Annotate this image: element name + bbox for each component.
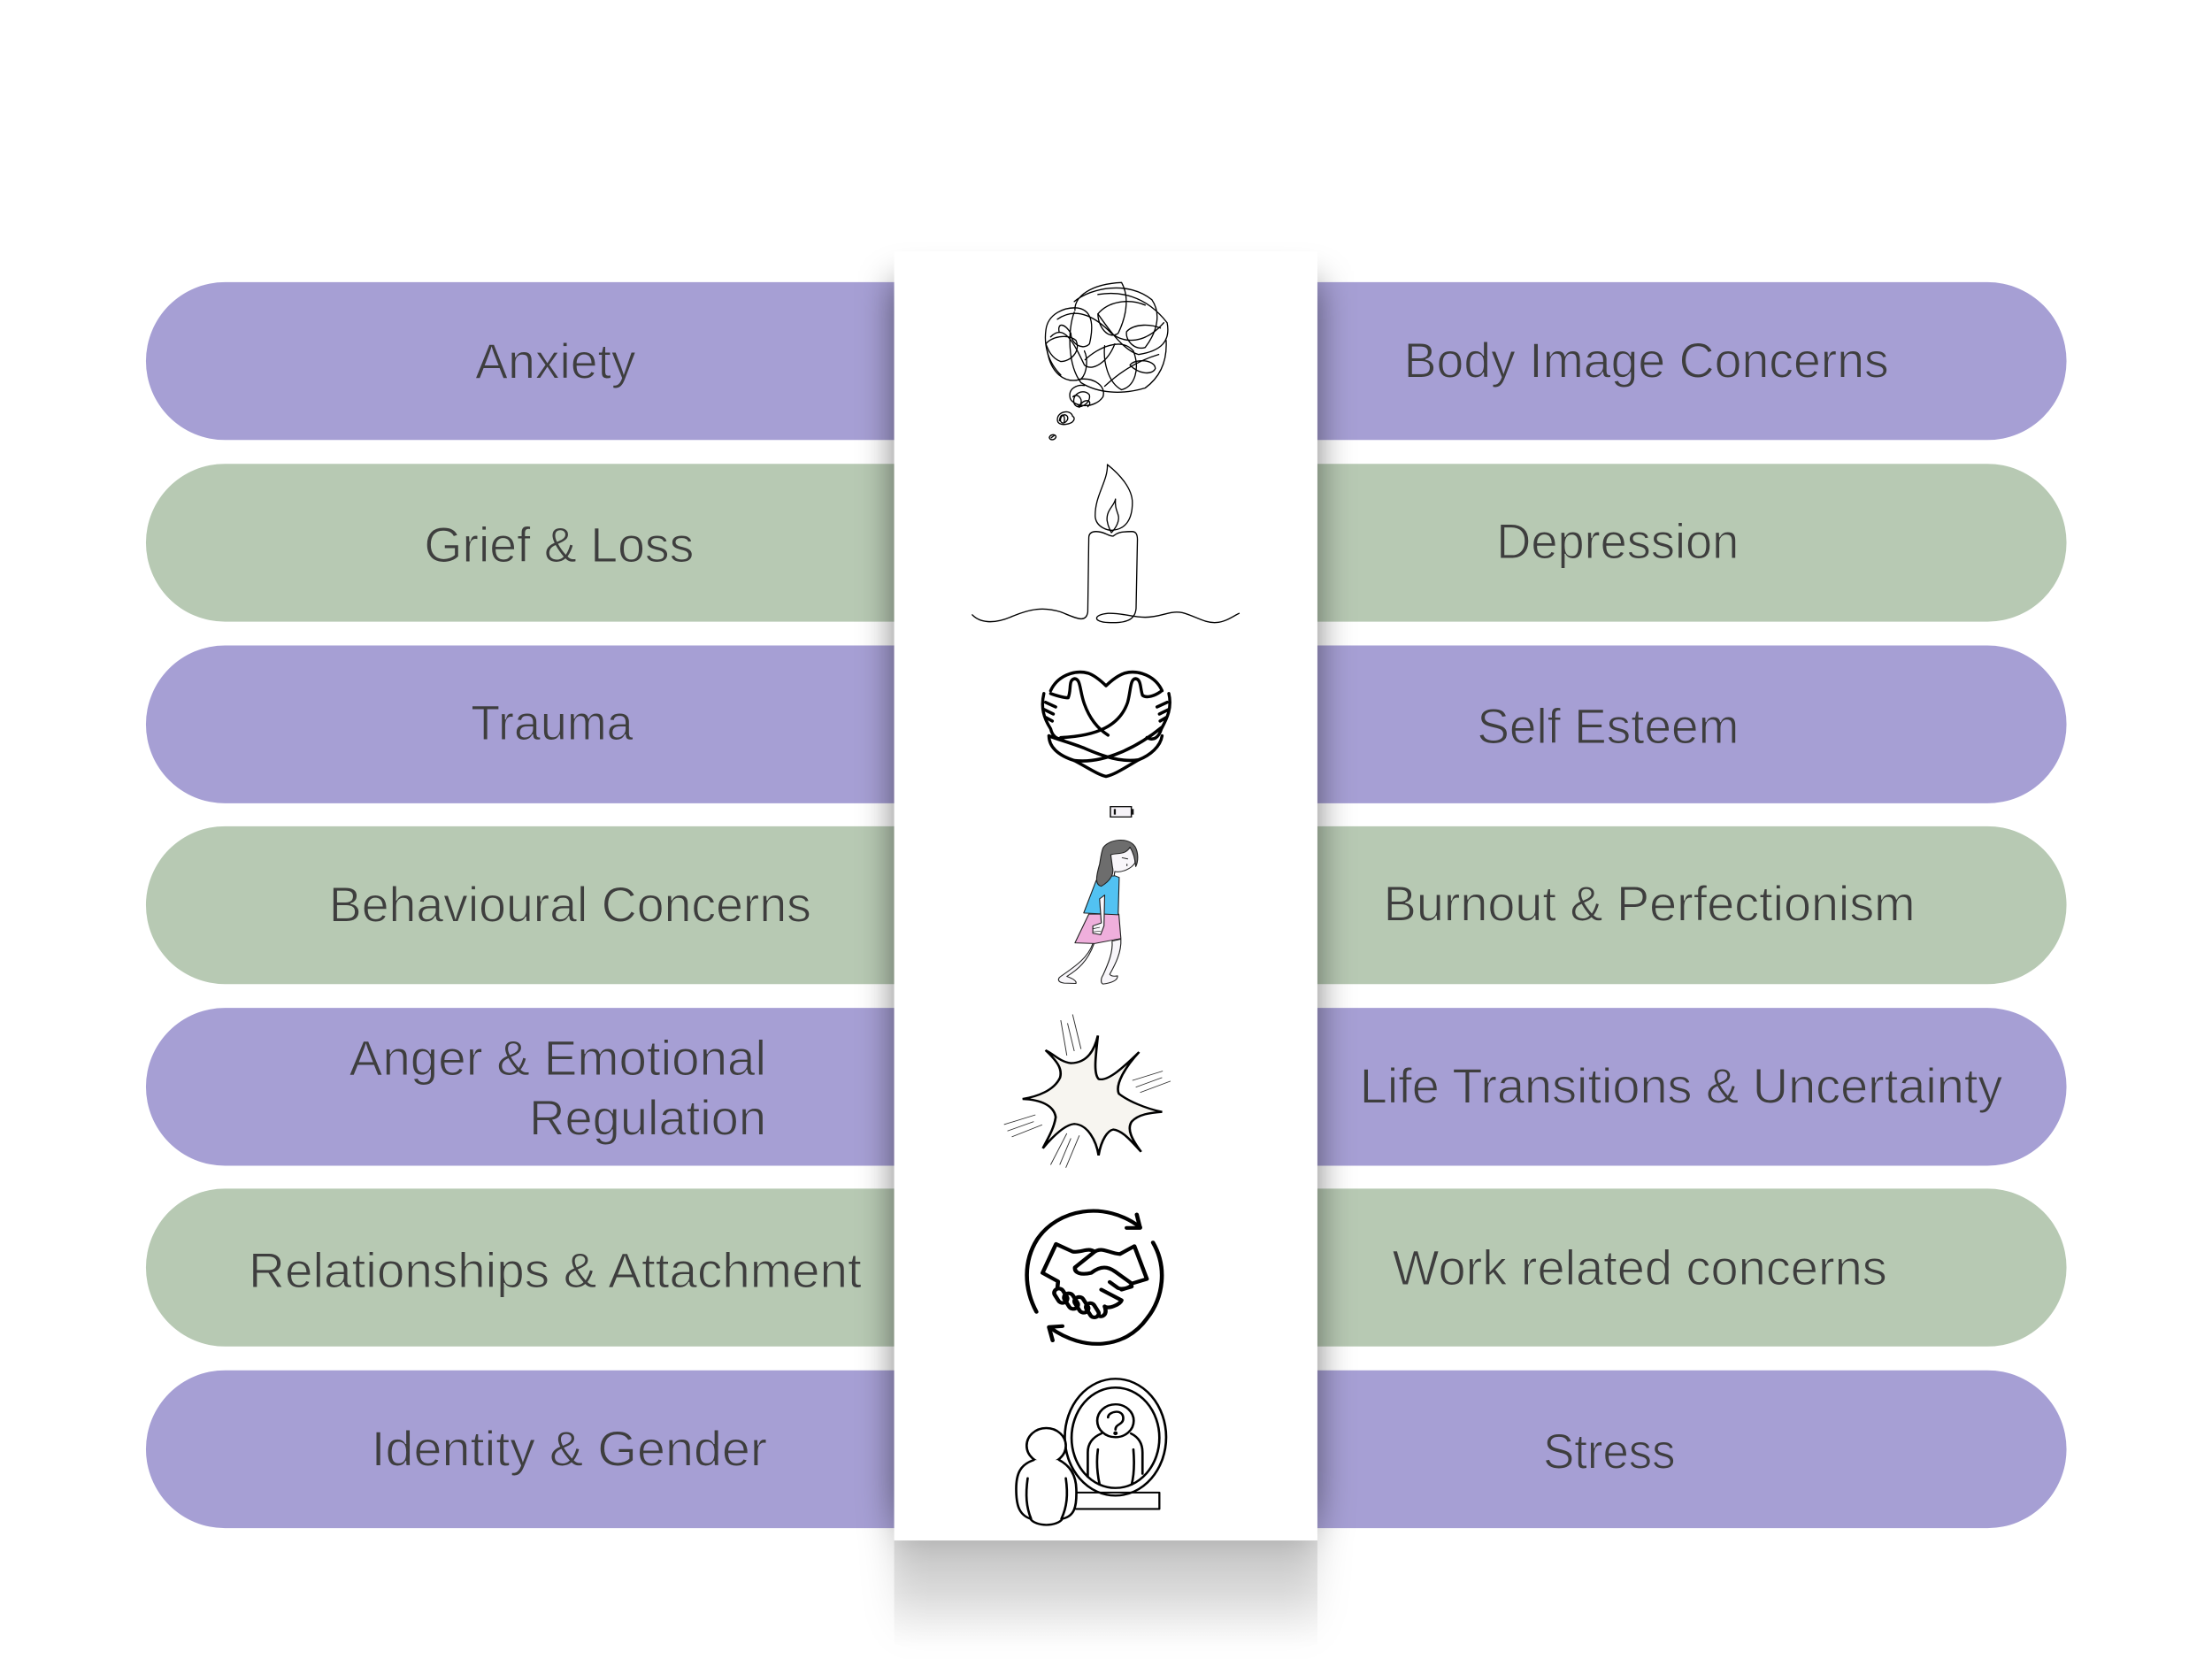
pill: Body Image Concerns [1305, 282, 2067, 440]
pill: Behavioural Concerns [146, 826, 900, 984]
pill: Work related concerns [1305, 1188, 2067, 1347]
center white panel [895, 251, 1317, 1540]
pill: Life Transitions & Uncertainty: Life Transitions & Uncertainty [1360, 1058, 2002, 1114]
icon: tired girl [1058, 840, 1138, 984]
pill: Anxiety: Anxiety [475, 334, 636, 389]
pill: Identity & Gender [146, 1371, 900, 1528]
pill: Anger & Emotional Regulation [146, 1008, 900, 1166]
pill: Depression [1305, 464, 2067, 622]
pill: Self Esteem [1305, 646, 2067, 803]
icon: handshake with circular arrows [1027, 1211, 1162, 1344]
pill: Body Image Concerns: Body Image Concerns [1404, 333, 1889, 388]
pill: Behavioural Concerns: Behavioural Concerns [329, 876, 811, 932]
pill: Anxiety [146, 282, 900, 440]
pill: Depression: Depression [1496, 513, 1739, 569]
pill: Burnout & Perfectionism [1305, 826, 2067, 984]
icon: candle [972, 465, 1239, 623]
panel shadow [895, 282, 1317, 1645]
pill: Trauma [146, 646, 900, 803]
icon: tangled thought bubble [1045, 282, 1168, 440]
pill: Anger & Emotional Regulation: Regulation [529, 1090, 766, 1146]
pill: Work related concerns: Work related concerns [1393, 1240, 1887, 1295]
pill: Self Esteem: Self Esteem [1477, 698, 1739, 754]
icon: person at mirror with question mark [1016, 1379, 1166, 1525]
pill: Grief & Loss: Grief & Loss [424, 517, 694, 572]
pill: Identity & Gender: Identity & Gender [372, 1420, 767, 1476]
panel reflection [895, 1539, 1317, 1647]
icon: burst [1004, 1014, 1171, 1168]
pill: Relationships & Attachment: Relationships & Attachment [249, 1242, 862, 1298]
pill: Anger & Emotional Regulation: Anger & Emotional [349, 1030, 766, 1086]
pill: Burnout & Perfectionism: Burnout & Perfectionism [1384, 875, 1916, 931]
pill: Grief & Loss [146, 464, 900, 622]
pill: Stress [1305, 1371, 2067, 1528]
pill: Life Transitions & Uncertainty [1305, 1008, 2067, 1166]
pill: Relationships & Attachment [146, 1188, 900, 1347]
pill: Stress: Stress [1543, 1423, 1676, 1479]
icon: self-hugging heart [1042, 672, 1170, 777]
pill: Trauma: Trauma [471, 695, 634, 750]
icon: low battery [1110, 807, 1133, 817]
